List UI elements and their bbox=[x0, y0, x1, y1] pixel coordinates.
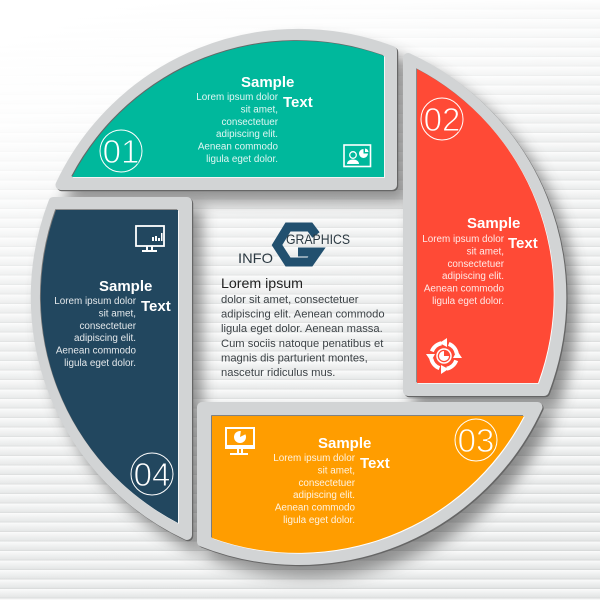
number badge 02: 02 bbox=[424, 101, 460, 138]
body text 04: consectetuer bbox=[79, 321, 137, 332]
number badge 01: 01 bbox=[103, 133, 139, 170]
body text 01 bbox=[196, 92, 279, 165]
panel 03: orange segment bbox=[202, 407, 539, 561]
segment shadows bbox=[46, 46, 571, 572]
body text 02: Lorem ipsum dolor bbox=[422, 234, 505, 245]
body text 01: consectetuer bbox=[221, 117, 279, 128]
body text 03: Aenean commodo bbox=[275, 503, 355, 514]
heading 03: Sample bbox=[318, 435, 371, 452]
body text 04: Aenean commodo bbox=[56, 346, 136, 357]
body text 01: Lorem ipsum dolor bbox=[196, 92, 279, 103]
body text 04: adipiscing elit. bbox=[74, 333, 136, 344]
body text 03: sit amet, bbox=[318, 465, 355, 476]
heading 01 bbox=[241, 74, 313, 111]
center body text: dolor sit amet, consectetuer bbox=[221, 294, 359, 306]
heading 04: Text bbox=[141, 298, 171, 315]
body text 01: adipiscing elit. bbox=[216, 129, 278, 140]
body text 01: sit amet, bbox=[241, 104, 278, 115]
body text 03 bbox=[273, 453, 356, 526]
heading 02 bbox=[467, 215, 538, 252]
body text 01: Aenean commodo bbox=[198, 142, 278, 153]
body text 02: sit amet, bbox=[467, 246, 504, 257]
heading 04: Sample bbox=[99, 278, 152, 295]
body text 02 bbox=[422, 234, 505, 307]
icon: hexagonal G bbox=[277, 227, 317, 262]
heading 01: Sample bbox=[241, 74, 294, 91]
center body text bbox=[221, 294, 385, 379]
center body text: Cum sociis natoque penatibus et bbox=[221, 338, 384, 350]
icon: presenter with pie chart bbox=[344, 145, 370, 166]
logo word INFO: INFO bbox=[238, 250, 273, 266]
center body text: adipiscing elit. Aenean commodo bbox=[221, 309, 385, 321]
center body text: ligula eget dolor. Aenean massa. bbox=[221, 323, 383, 335]
body text 03: consectetuer bbox=[298, 478, 356, 489]
center logo: INFO G GRAPHICS bbox=[238, 227, 350, 266]
body text 03: adipiscing elit. bbox=[293, 490, 355, 501]
center body text: magnis dis parturient montes, bbox=[221, 352, 368, 364]
number badge 04: 04 bbox=[134, 456, 170, 493]
heading 03 bbox=[318, 435, 390, 472]
panel 02: red segment bbox=[408, 58, 563, 392]
body text 04: sit amet, bbox=[99, 308, 136, 319]
heading 04 bbox=[99, 278, 171, 315]
icon: circular arrows with clock bbox=[426, 338, 462, 374]
center body text: nascetur ridiculus mus. bbox=[221, 367, 335, 379]
icon: monitor with pie chart bbox=[225, 427, 255, 455]
body text 02: ligula eget dolor. bbox=[432, 296, 504, 307]
body text 02: Aenean commodo bbox=[424, 284, 504, 295]
panel 01: green segment bbox=[60, 34, 393, 186]
number badge 03: 03 bbox=[458, 422, 494, 459]
heading 03: Text bbox=[360, 455, 390, 472]
body text 02: consectetuer bbox=[447, 259, 505, 270]
body text 03: ligula eget dolor. bbox=[283, 515, 355, 526]
body text 01: ligula eget dolor. bbox=[206, 154, 278, 165]
heading 01: Text bbox=[283, 94, 313, 111]
heading 02: Text bbox=[508, 235, 538, 252]
body text 04 bbox=[54, 296, 137, 369]
body text 04: ligula eget dolor. bbox=[64, 358, 136, 369]
logo word GRAPHICS: GRAPHICS bbox=[286, 232, 350, 247]
body text 04: Lorem ipsum dolor bbox=[54, 296, 137, 307]
panel 04: navy segment bbox=[36, 202, 188, 536]
body text 03: Lorem ipsum dolor bbox=[273, 453, 356, 464]
body text 02: adipiscing elit. bbox=[442, 271, 504, 282]
center heading: Lorem ipsum bbox=[221, 276, 303, 292]
icon: monitor with bar chart bbox=[136, 226, 164, 252]
heading 02: Sample bbox=[467, 215, 520, 232]
